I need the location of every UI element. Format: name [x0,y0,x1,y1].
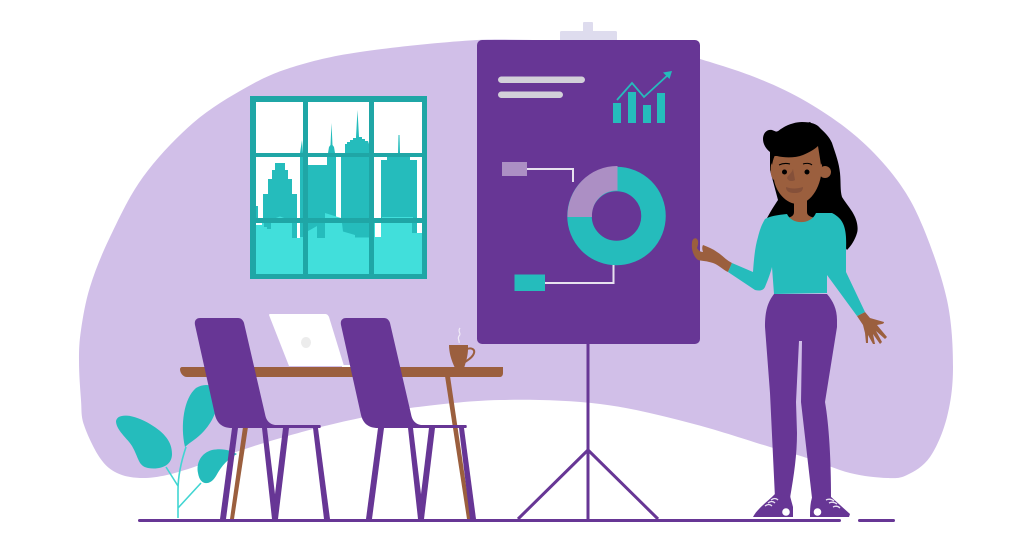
text lines [498,76,585,98]
hair back [763,122,858,250]
plant [116,385,237,518]
head and ear [771,142,831,204]
legend box: lilac [502,162,573,182]
table [180,367,503,519]
chair: left [195,318,330,519]
presenter [692,122,887,517]
city skyline [256,110,417,220]
background blob [79,39,953,478]
donut chart [567,166,654,253]
mini bar chart with arrow [613,71,672,123]
laptop [269,314,352,368]
chair: right [341,318,476,519]
hand left [692,238,732,272]
flipchart board [477,22,700,344]
sweater [728,213,865,316]
clip [560,22,617,44]
hair front [770,122,832,165]
shoes [753,494,850,517]
ground band [256,223,422,274]
trousers [765,294,837,498]
floor line [138,519,895,522]
neck [787,198,816,228]
hand right [857,312,887,344]
flipchart stand [518,342,658,519]
foreground rooftops [256,213,422,238]
legend box: teal [514,265,614,291]
face details [779,163,812,193]
coffee cup [449,328,474,368]
window mullions [303,102,308,274]
window [250,96,427,279]
